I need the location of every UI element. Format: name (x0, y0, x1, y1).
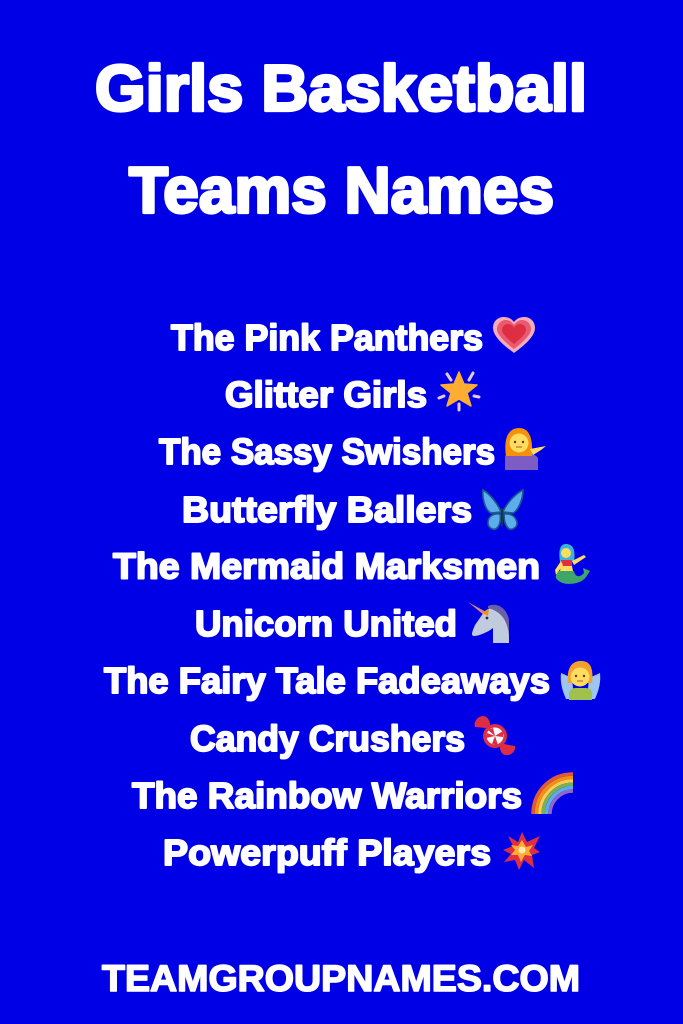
team name: The Pink Panthers: The Pink Panthers (171, 317, 483, 358)
title: Teams Names (129, 154, 554, 226)
team name: Candy Crushers: Candy Crushers (190, 718, 465, 759)
icon: fairy (561, 661, 600, 700)
title (95, 52, 587, 226)
icon: glowing star (439, 372, 479, 410)
team name: The Sassy Swishers: The Sassy Swishers (159, 431, 495, 472)
icon: growing heart (493, 317, 535, 353)
team name: Glitter Girls: Glitter Girls (225, 374, 427, 415)
team name: The Mermaid Marksmen: The Mermaid Marksmen (113, 546, 540, 586)
team names list (104, 317, 600, 873)
title: Girls Basketball (95, 52, 587, 124)
team name: The Fairy Tale Fadeaways: The Fairy Tale Fadeaways (104, 660, 550, 701)
icon: unicorn (468, 602, 509, 643)
team name: Unicorn United: Unicorn United (195, 603, 457, 644)
team name: Powerpuff Players: Powerpuff Players (163, 832, 491, 873)
footer website: TEAMGROUPNAMES.COM (102, 958, 580, 999)
team name: The Rainbow Warriors: The Rainbow Warriors (132, 775, 522, 816)
icon: mermaid (555, 544, 590, 584)
icon: butterfly (483, 490, 523, 529)
icon: person tipping hand (505, 428, 546, 470)
icon: candy (475, 716, 515, 755)
icon: collision (503, 832, 540, 870)
team name: Butterfly Ballers: Butterfly Ballers (182, 489, 472, 530)
icon: rainbow (533, 774, 573, 814)
